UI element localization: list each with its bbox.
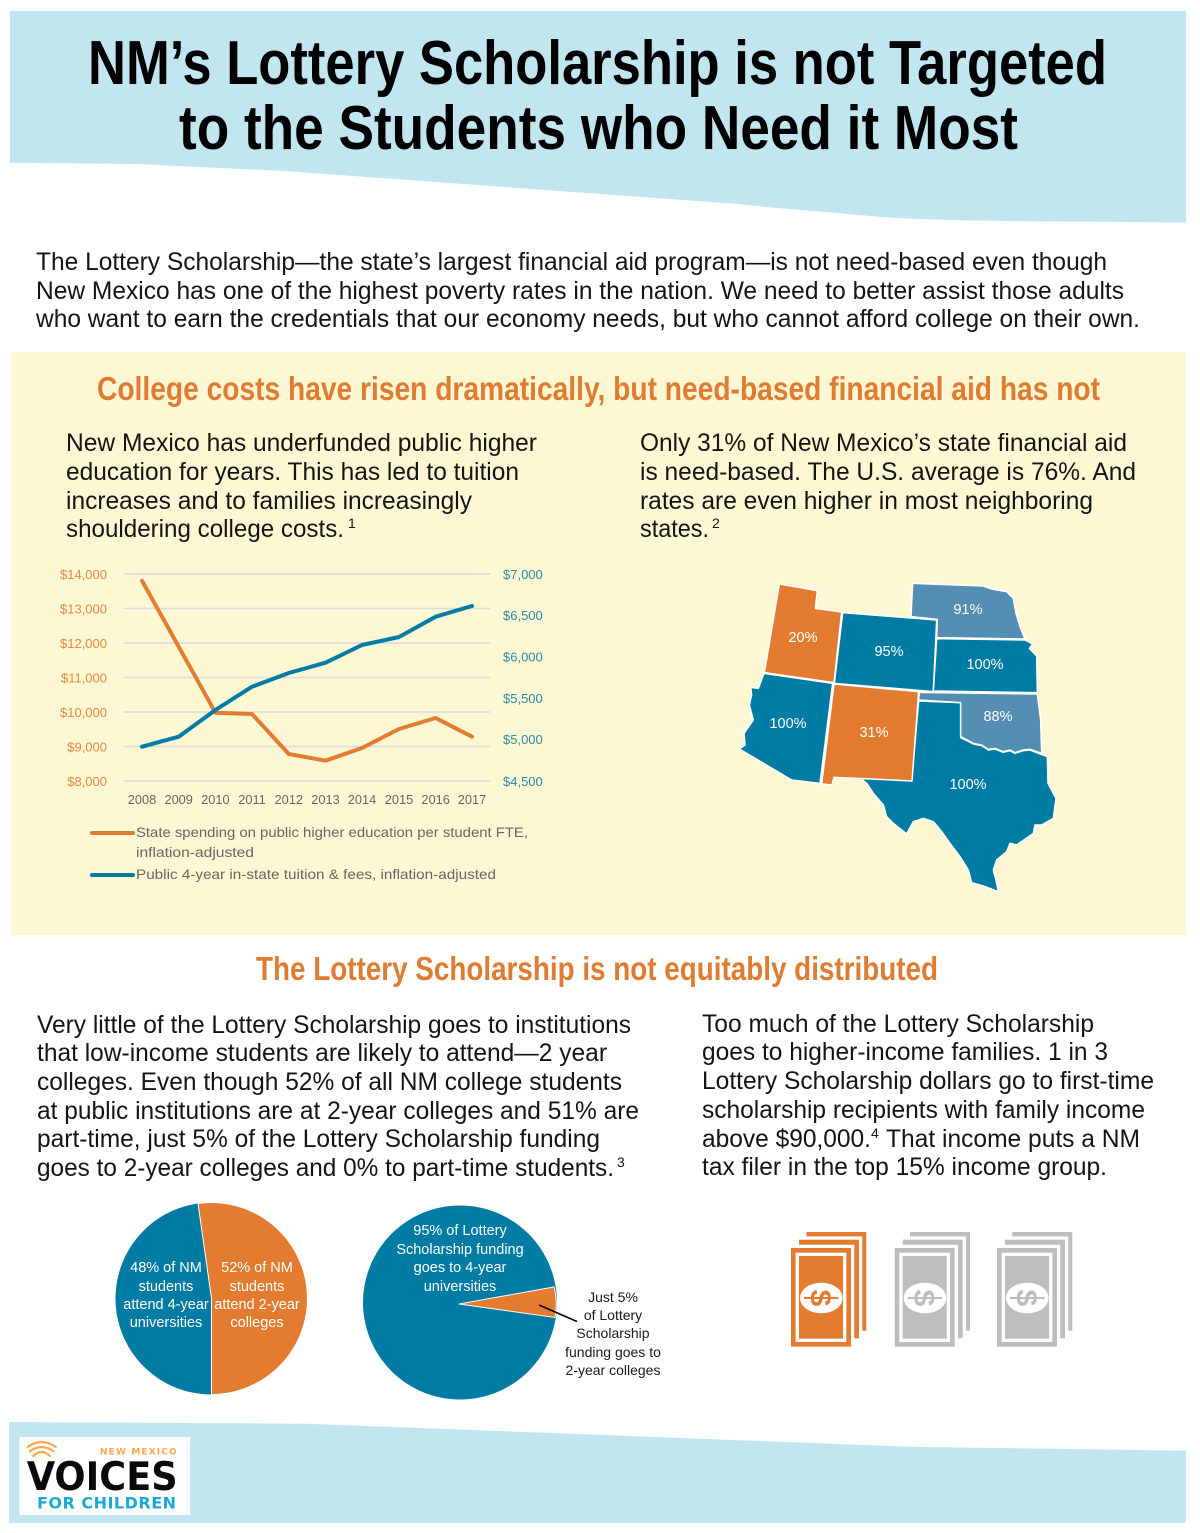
label: 95 percent: 95% of Lottery — [413, 1223, 507, 1239]
logo text: New Mexico: NEW MEXICO — [100, 1448, 177, 1458]
year labels: 2011 — [238, 792, 266, 807]
label: 52 percent: attend 2-year — [214, 1297, 300, 1313]
callout: 5 percent: of Lottery — [584, 1307, 642, 1323]
right axis labels: $6,000 — [503, 650, 543, 664]
text block: institutions: 3 — [617, 1154, 625, 1170]
year labels: 2012 — [275, 792, 303, 807]
year labels: 2009 — [164, 792, 193, 807]
text block: underfunding: 1 — [348, 515, 356, 531]
state percentages: 100% — [949, 777, 987, 793]
label: 95 percent: Scholarship funding — [396, 1242, 524, 1258]
label: 95 percent: goes to 4-year — [414, 1260, 507, 1276]
label: 48 percent — [123, 1260, 209, 1331]
line: tuition — [142, 606, 472, 747]
callout: 5 percent: funding goes to — [565, 1344, 661, 1360]
state: Arizona — [739, 673, 833, 783]
right axis labels — [503, 567, 543, 789]
title: to the Students who Need it Most — [179, 94, 1018, 163]
state percentages — [769, 602, 1013, 793]
text block: institutions — [37, 1011, 639, 1182]
label: 48 percent: students — [139, 1279, 193, 1295]
intro text: The Lottery Scholarship—the state’s largest financial aid program—is not need-based even though — [36, 248, 1107, 276]
legend — [92, 824, 528, 882]
legend: inflation-adjusted — [136, 844, 254, 860]
state: Texas — [859, 701, 1056, 892]
year labels: 2016 — [421, 792, 450, 807]
year labels: 2008 — [128, 792, 156, 807]
logo — [20, 1437, 190, 1515]
text block: underfunding: increases and to families increasingly — [66, 487, 472, 515]
state: Utah — [764, 584, 842, 683]
pie chart: college students — [116, 1202, 308, 1394]
state: Nebraska — [911, 583, 1025, 639]
panel: college costs — [11, 352, 1186, 935]
text block: institutions: colleges. Even though 52% of all NM college students — [37, 1068, 622, 1096]
right axis labels: $5,000 — [503, 732, 543, 747]
text block: higher-income families: Lottery Scholarship dollars go to first-time — [702, 1067, 1154, 1095]
map of neighboring states — [739, 583, 1056, 892]
icon: gray money stack: $ — [1010, 1290, 1042, 1307]
text block: higher-income families: That income puts a NM — [886, 1125, 1140, 1153]
state percentages: 100% — [769, 716, 807, 732]
left axis labels: $10,000 — [60, 705, 107, 720]
text block: higher-income families: Too much of the Lottery Scholarship — [702, 1010, 1094, 1038]
icon: gray money stack — [995, 1232, 1072, 1348]
year labels: 2013 — [311, 792, 340, 807]
line chart — [60, 567, 543, 882]
text block: underfunding — [66, 429, 537, 543]
label: 95 percent: universities — [424, 1279, 496, 1295]
text block: underfunding: shouldering college costs. — [66, 515, 344, 543]
line: state spending — [142, 581, 472, 761]
label: 52 percent: 52% of NM — [221, 1260, 293, 1276]
text block: higher-income families — [702, 1010, 1154, 1181]
left axis labels: $11,000 — [61, 670, 107, 686]
state percentages: 20% — [788, 630, 818, 646]
text block: institutions: at public institutions are at 2-year colleges and 51% are — [37, 1097, 639, 1125]
year labels: 2010 — [201, 792, 230, 807]
intro text: who want to earn the credentials that our economy needs, but who cannot afford college on their own. — [35, 305, 1140, 333]
text block: need-based share: Only 31% of New Mexico’s state financial aid — [640, 429, 1127, 457]
footer banner — [9, 1422, 1186, 1523]
text block: underfunding: New Mexico has underfunded public higher — [66, 429, 537, 457]
state percentages: 91% — [953, 602, 983, 618]
state: Kansas — [933, 639, 1037, 693]
year labels: 2017 — [458, 792, 486, 807]
title — [88, 29, 1107, 163]
state: New Mexico — [822, 684, 919, 785]
year labels — [128, 792, 486, 807]
year labels: 2015 — [385, 792, 413, 807]
right axis labels: $7,000 — [503, 567, 543, 582]
text block: higher-income families: goes to higher-income families. 1 in 3 — [702, 1038, 1108, 1066]
text block: institutions: Very little of the Lottery Scholarship goes to institutions — [37, 1011, 631, 1039]
left axis labels: $9,000 — [67, 740, 107, 754]
logo text: For Children: FOR CHILDREN — [37, 1494, 176, 1513]
left axis labels: $8,000 — [67, 774, 107, 789]
callout: 5 percent: 2-year colleges — [566, 1362, 660, 1378]
right axis labels: $5,500 — [503, 691, 543, 706]
state: Oklahoma — [919, 692, 1042, 753]
callout: 5 percent — [565, 1289, 661, 1378]
icon: gray money stack: $ — [907, 1290, 940, 1307]
left axis labels: $12,000 — [60, 636, 107, 651]
state percentages: 88% — [983, 709, 1013, 725]
label: 48 percent: universities — [130, 1315, 202, 1331]
text block: need-based share: states. — [640, 515, 709, 543]
text block: higher-income families: tax filer in the top 15% income group. — [702, 1153, 1107, 1181]
left axis labels: $14,000 — [60, 567, 107, 582]
right axis labels: $4,500 — [503, 774, 543, 789]
state percentages: 100% — [966, 657, 1004, 673]
callout: 5 percent: Just 5% — [588, 1289, 638, 1305]
text block: need-based share: 2 — [712, 515, 720, 531]
state percentages: 95% — [874, 644, 904, 660]
label: 48 percent: 48% of NM — [130, 1260, 202, 1276]
text block: need-based share: rates are even higher in most neighboring — [640, 487, 1093, 515]
callout line — [539, 1305, 577, 1322]
label: 95 percent — [396, 1223, 524, 1295]
text block: institutions: part-time, just 5% of the Lottery Scholarship funding — [37, 1125, 600, 1153]
text block: higher-income families: scholarship recipients with family income — [702, 1096, 1145, 1124]
legend: State spending on public higher education per student FTE, — [136, 824, 528, 840]
text block: higher-income families: above $90,000. — [702, 1125, 871, 1153]
text block: underfunding: education for years. This has led to tuition — [66, 458, 519, 486]
legend: Public 4-year in-state tuition & fees, inflation-adjusted — [136, 866, 496, 882]
intro text — [35, 248, 1140, 333]
heading: equity: The Lottery Scholarship is not equitably distributed — [256, 950, 938, 987]
pie chart: scholarship funding — [363, 1206, 661, 1400]
text block: higher-income families: 4 — [871, 1125, 879, 1141]
intro text: New Mexico has one of the highest poverty rates in the nation. We need to better assist those adults — [36, 277, 1124, 305]
text block: institutions: goes to 2-year colleges and 0% to part-time students. — [37, 1154, 614, 1182]
icon: gray money stack — [893, 1232, 970, 1348]
label: 52 percent — [214, 1260, 300, 1331]
icon: orange money stack: $ — [804, 1290, 836, 1307]
text block: need-based share: is need-based. The U.S. average is 76%. And — [640, 458, 1136, 486]
icon: sound waves — [28, 1442, 56, 1456]
state percentages: 31% — [859, 725, 889, 741]
state: Wyoming — [834, 613, 937, 692]
label: 48 percent: attend 4-year — [123, 1297, 209, 1313]
left axis labels — [60, 567, 107, 789]
icon: orange money stack — [789, 1232, 866, 1348]
label: 52 percent: colleges — [230, 1315, 284, 1331]
year labels: 2014 — [348, 792, 376, 807]
logo text: Voices: VOICES — [27, 1455, 178, 1500]
left axis labels: $13,000 — [60, 602, 107, 616]
header banner — [10, 11, 1186, 222]
text block: need-based share — [640, 429, 1136, 543]
text block: institutions: that low-income students are likely to attend—2 year — [37, 1039, 607, 1067]
right axis labels: $6,500 — [503, 608, 543, 623]
callout: 5 percent: Scholarship — [576, 1325, 650, 1341]
label: 52 percent: students — [230, 1279, 284, 1295]
